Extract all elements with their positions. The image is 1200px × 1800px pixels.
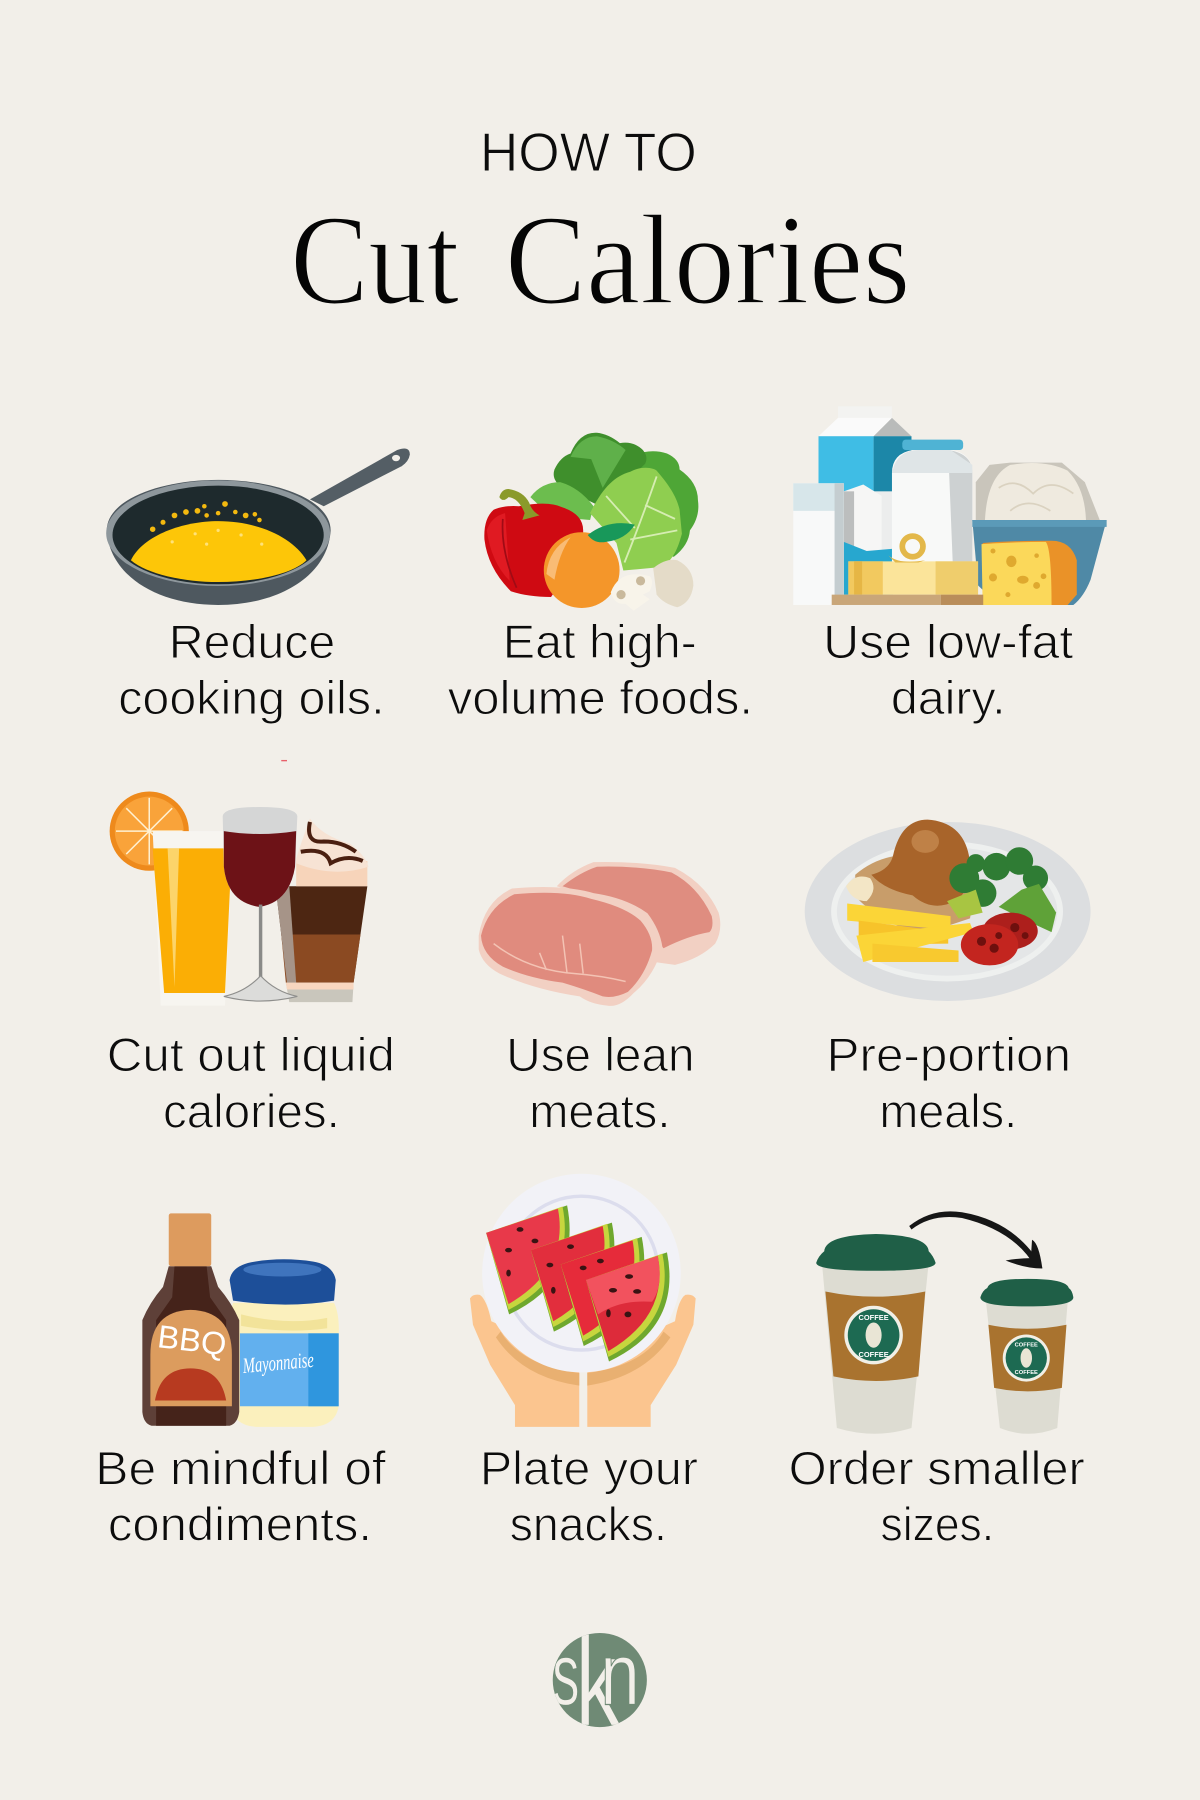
- title: Cut Calories: [290, 188, 910, 331]
- text: Order smaller sizes: Order smaller: [789, 1442, 1085, 1495]
- text: Plate your snacks: snacks.: [510, 1499, 667, 1552]
- text: Pre-portion meals: meals.: [879, 1085, 1017, 1138]
- icon: large and small coffee cups with arrow: COFFEE: [858, 1350, 889, 1359]
- text: Eat high-volume foods: [448, 616, 753, 725]
- text: Plate your snacks: Plate your: [480, 1442, 698, 1495]
- icon: dairy products: [793, 406, 1107, 605]
- text: Use low-fat dairy: dairy.: [891, 672, 1006, 725]
- text: Reduce cooking oils: Reduce: [169, 616, 335, 669]
- text: Cut out liquid calories: Cut out liquid: [107, 1029, 395, 1082]
- icon: BBQ sauce and mayonnaise: Mayonnaise: [241, 1348, 315, 1378]
- text: Be mindful of condiments: condiments.: [108, 1499, 372, 1552]
- logo: skn monogram: n: [600, 1625, 640, 1723]
- panel: use low-fat dairy: [793, 406, 1107, 725]
- icon: large and small coffee cups with arrow: [816, 1211, 1073, 1434]
- text: Use lean meats: Use lean: [506, 1029, 695, 1082]
- panel: plate your snacks: [470, 1174, 698, 1552]
- text: Be mindful of condiments: [95, 1442, 387, 1552]
- icon: large and small coffee cups with arrow: COFFEE: [858, 1313, 889, 1322]
- text: Cut out liquid calories: calories.: [163, 1085, 340, 1138]
- panel: cut out liquid calories: [107, 792, 395, 1138]
- logo: skn monogram: k: [575, 1612, 621, 1753]
- text: Order smaller sizes: sizes.: [880, 1499, 994, 1552]
- text: Be mindful of condiments: Be mindful of: [95, 1442, 387, 1495]
- text: Reduce cooking oils: [118, 616, 385, 725]
- panel: order smaller sizes: [789, 1211, 1085, 1552]
- title: Cut Calories: Cut: [290, 188, 459, 331]
- icon: vegetables: [484, 433, 698, 611]
- panel: use lean meats: [479, 862, 720, 1138]
- heading: How to: HOW TO: [480, 122, 697, 183]
- text: Use lean meats: [506, 1029, 695, 1138]
- text: Pre-portion meals: [827, 1029, 1071, 1138]
- logo: skn monogram: [552, 1633, 647, 1728]
- text: Use low-fat dairy: Use low-fat: [823, 616, 1073, 669]
- title: Cut Calories: Calories: [505, 188, 910, 331]
- text: Eat high-volume foods: Eat high-: [503, 616, 697, 669]
- slice 4: [586, 1252, 670, 1361]
- icon: large and small coffee cups with arrow: COFFEE: [1015, 1343, 1038, 1349]
- slice 3: [561, 1237, 644, 1346]
- icon: portioned plate of food: [805, 820, 1091, 1001]
- text: Use low-fat dairy: [823, 616, 1073, 725]
- slice 2: [531, 1223, 614, 1332]
- logo: skn monogram: s: [552, 1624, 580, 1724]
- icon: frying pan with oil: [106, 448, 410, 605]
- icon: hands holding plate of watermelon: [470, 1174, 696, 1427]
- text: Eat high-volume foods: volume foods.: [448, 672, 753, 725]
- text: Order smaller sizes: [789, 1442, 1085, 1552]
- icon: BBQ sauce and mayonnaise: BBQ: [156, 1318, 228, 1362]
- icon: juice, wine and coffee drinks: [110, 792, 368, 1006]
- text: Pre-portion meals: Pre-portion: [827, 1029, 1071, 1082]
- panel: pre-portion meals: [805, 820, 1091, 1138]
- decorative red speck: [281, 760, 287, 761]
- text: Use lean meats: meats.: [529, 1085, 670, 1138]
- text: Cut out liquid calories: [107, 1029, 395, 1138]
- icon: lean meat chops: [479, 862, 720, 1006]
- icon: large and small coffee cups with arrow: COFFEE: [1015, 1370, 1038, 1376]
- text: Reduce cooking oils: cooking oils.: [118, 672, 385, 725]
- panel: reduce cooking oils: [106, 448, 410, 725]
- slice 1: [486, 1205, 570, 1314]
- panel: eat high-volume foods: [448, 433, 753, 725]
- panel: be mindful of condiments: [95, 1213, 387, 1552]
- text: Plate your snacks: [480, 1442, 698, 1552]
- icon: BBQ sauce and mayonnaise: [142, 1213, 339, 1427]
